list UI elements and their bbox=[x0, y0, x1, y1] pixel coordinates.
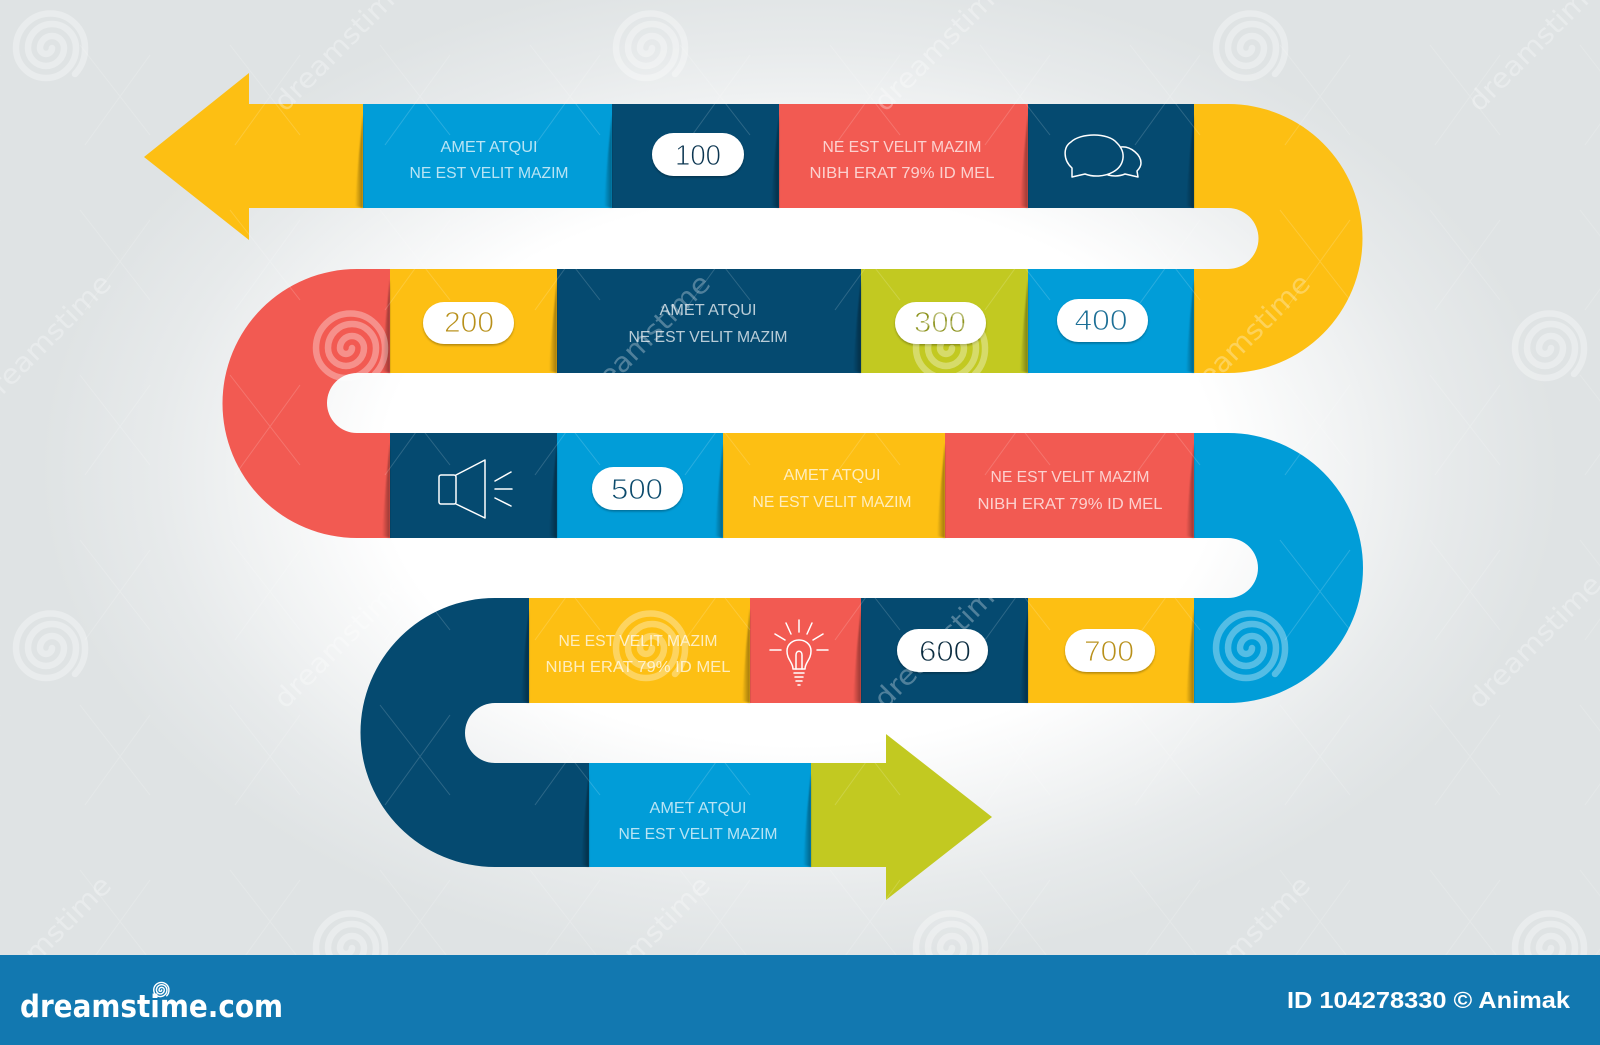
cell: navy with chat icon bbox=[1020, 104, 1194, 208]
row 3 bbox=[382, 433, 1194, 538]
watermark: diagonal dreamstime text: dreamstime bbox=[571, 268, 717, 414]
cell: red text NE EST VELIT MAZIM: NIBH ERAT 79% ID MEL bbox=[810, 165, 995, 182]
cell: red text NE EST VELIT MAZIM bbox=[771, 104, 1028, 208]
row 4 bbox=[521, 598, 1194, 703]
watermark: diagonal dreamstime text: dreamstime bbox=[268, 569, 414, 715]
cell: navy with pill 100: 100 bbox=[675, 140, 721, 172]
cell: yellow text NE EST VELIT MAZIM: NIBH ERAT 79% ID MEL bbox=[546, 659, 731, 676]
footer bar bbox=[0, 955, 1600, 1045]
cell: blue text AMET ATQUI: AMET ATQUI bbox=[440, 139, 538, 156]
cell: yellow text AMET ATQUI: AMET ATQUI bbox=[784, 467, 880, 484]
cell: yellow with pill 700: 700 bbox=[1084, 636, 1134, 668]
cell: red text NE EST VELIT MAZIM: NE EST VELIT MAZIM bbox=[990, 469, 1150, 486]
watermark: diagonal dreamstime text: dreamstime bbox=[1171, 268, 1317, 414]
icon: logo spiral bbox=[154, 982, 169, 997]
cell: navy text AMET ATQUI bbox=[549, 269, 861, 373]
cell: blue text AMET ATQUI: NE EST VELIT MAZIM bbox=[410, 165, 568, 182]
cell: yellow with pill 200: 200 bbox=[444, 307, 494, 339]
curve: yellow right bend bbox=[1186, 104, 1362, 373]
cell: blue with pill 500: 500 bbox=[611, 474, 663, 506]
cell: yellow text AMET ATQUI bbox=[715, 433, 945, 538]
cell: navy text AMET ATQUI: AMET ATQUI bbox=[660, 302, 756, 319]
cell: navy with speaker icon bbox=[382, 433, 557, 538]
cell: yellow with pill 200 bbox=[382, 269, 557, 373]
cell: red text NE EST VELIT MAZIM bbox=[937, 433, 1194, 538]
row 5: blue text cell: NE EST VELIT MAZIM bbox=[618, 826, 778, 843]
watermark: diagonal dreamstime text: dreamstime bbox=[1171, 870, 1317, 1016]
cell: navy with pill 600: 600 bbox=[919, 636, 971, 668]
cell: blue text AMET ATQUI bbox=[355, 104, 612, 208]
icon: light bulb bbox=[770, 620, 828, 685]
row 5: blue text cell: AMET ATQUI bbox=[650, 800, 746, 817]
cell: red with light bulb icon bbox=[742, 598, 861, 703]
cell: navy with pill 100 bbox=[604, 104, 779, 208]
watermark: diagonal dreamstime text: dreamstime bbox=[868, 569, 1014, 715]
arrow: start, yellow, pointing left bbox=[144, 73, 363, 240]
cell: yellow text NE EST VELIT MAZIM bbox=[521, 598, 750, 703]
curve: blue right bend bbox=[1186, 433, 1363, 703]
row 2 bbox=[382, 269, 1194, 373]
cell: yellow with pill 700 bbox=[1020, 598, 1194, 703]
cell: yellow text NE EST VELIT MAZIM: NE EST VELIT MAZIM bbox=[558, 633, 718, 650]
icon: chat bubbles bbox=[1065, 135, 1141, 177]
cell: navy with pill 600 bbox=[853, 598, 1028, 703]
cell: blue with pill 400: 400 bbox=[1074, 305, 1128, 337]
cell: green with pill 300 bbox=[853, 269, 1028, 373]
image id and credit: ID 104278330 © Animak bbox=[1287, 987, 1570, 1013]
row 5: blue text cell bbox=[581, 763, 811, 867]
icon: speaker bbox=[439, 460, 512, 518]
row 1 bbox=[355, 104, 1194, 208]
cell: green with pill 300: 300 bbox=[914, 307, 966, 339]
cell: red text NE EST VELIT MAZIM: NIBH ERAT 79% ID MEL bbox=[978, 496, 1163, 513]
curve: navy left bend bbox=[360, 598, 589, 867]
cell: navy text AMET ATQUI: NE EST VELIT MAZIM bbox=[628, 329, 788, 346]
logo: dreamstime.com: dreamstime.com bbox=[20, 989, 283, 1025]
curve: red left bend bbox=[223, 269, 390, 538]
arrow: end, green, pointing right bbox=[803, 734, 992, 900]
cell: blue with pill 400 bbox=[1020, 269, 1194, 373]
cell: blue with pill 500 bbox=[549, 433, 723, 538]
cell: yellow text AMET ATQUI: NE EST VELIT MAZIM bbox=[752, 494, 912, 511]
cell: red text NE EST VELIT MAZIM: NE EST VELIT MAZIM bbox=[822, 139, 982, 156]
watermark: diagonal dreamstime text: dreamstime bbox=[1462, 569, 1600, 715]
watermark: diagonal dreamstime text: dreamstime bbox=[571, 870, 717, 1016]
